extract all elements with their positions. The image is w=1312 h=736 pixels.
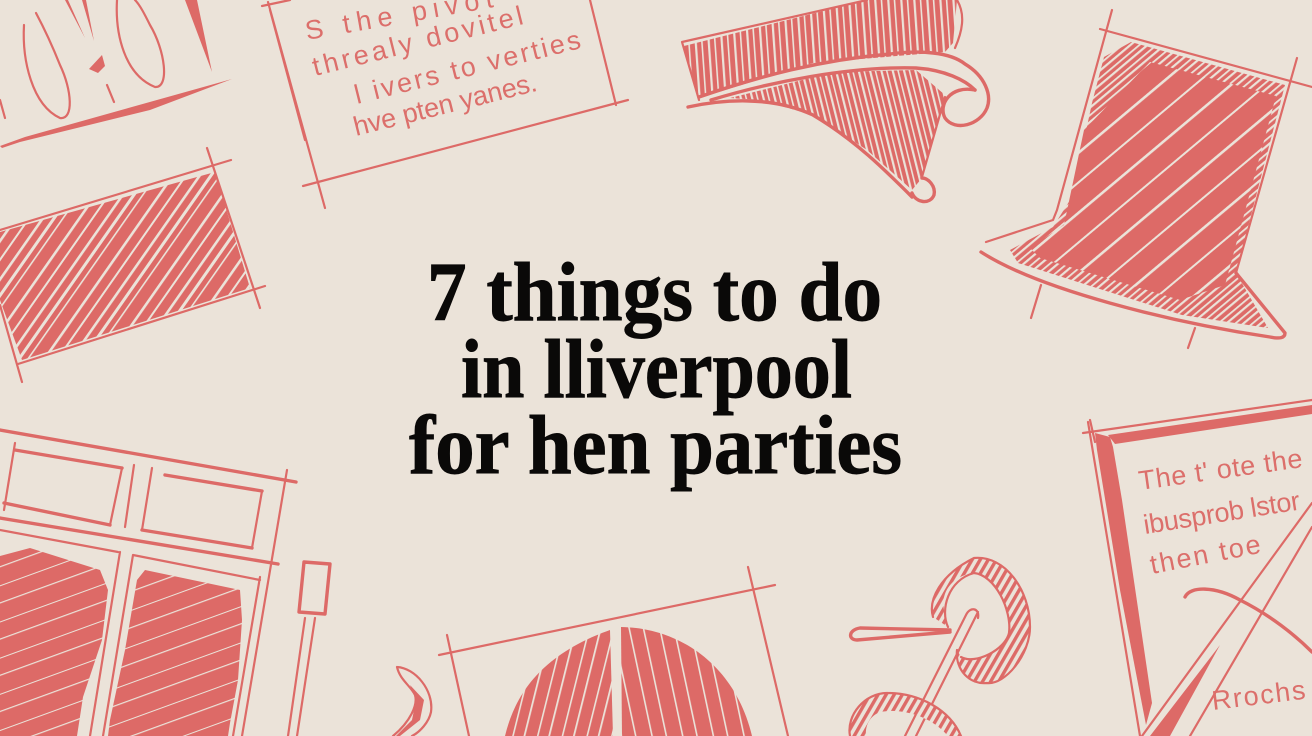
sketch: note card top xyxy=(262,0,628,208)
note handwriting: Rrochs xyxy=(1210,675,1307,716)
title: in lliverpool xyxy=(461,323,852,416)
note card handwriting: threaly dovitel xyxy=(309,0,526,82)
sketch: small horn xyxy=(393,667,431,736)
window pole xyxy=(288,562,330,736)
sketch: dome xyxy=(439,567,788,736)
sketch: window xyxy=(0,430,330,736)
sketch: hat xyxy=(981,10,1312,348)
note handwriting xyxy=(1137,443,1307,716)
note handwriting: then toe xyxy=(1147,529,1263,580)
title: 7 things to do xyxy=(427,246,882,339)
title: for hen parties xyxy=(409,399,902,492)
note handwriting: ibusprob lstor xyxy=(1141,486,1302,540)
sketch: hatched rectangle left xyxy=(0,148,265,382)
sketch: bottom-right note xyxy=(1083,400,1312,736)
note card handwriting: l ivers to verties xyxy=(351,25,584,110)
note handwriting: The t' ote the xyxy=(1137,443,1304,496)
title xyxy=(409,246,902,492)
sketch: curved fan xyxy=(682,0,989,202)
sketch: curl and pin xyxy=(849,558,1030,736)
sketch: top-left sign xyxy=(0,0,232,148)
note card handwriting xyxy=(303,0,584,142)
note card handwriting: hve pten yanes. xyxy=(350,67,540,142)
